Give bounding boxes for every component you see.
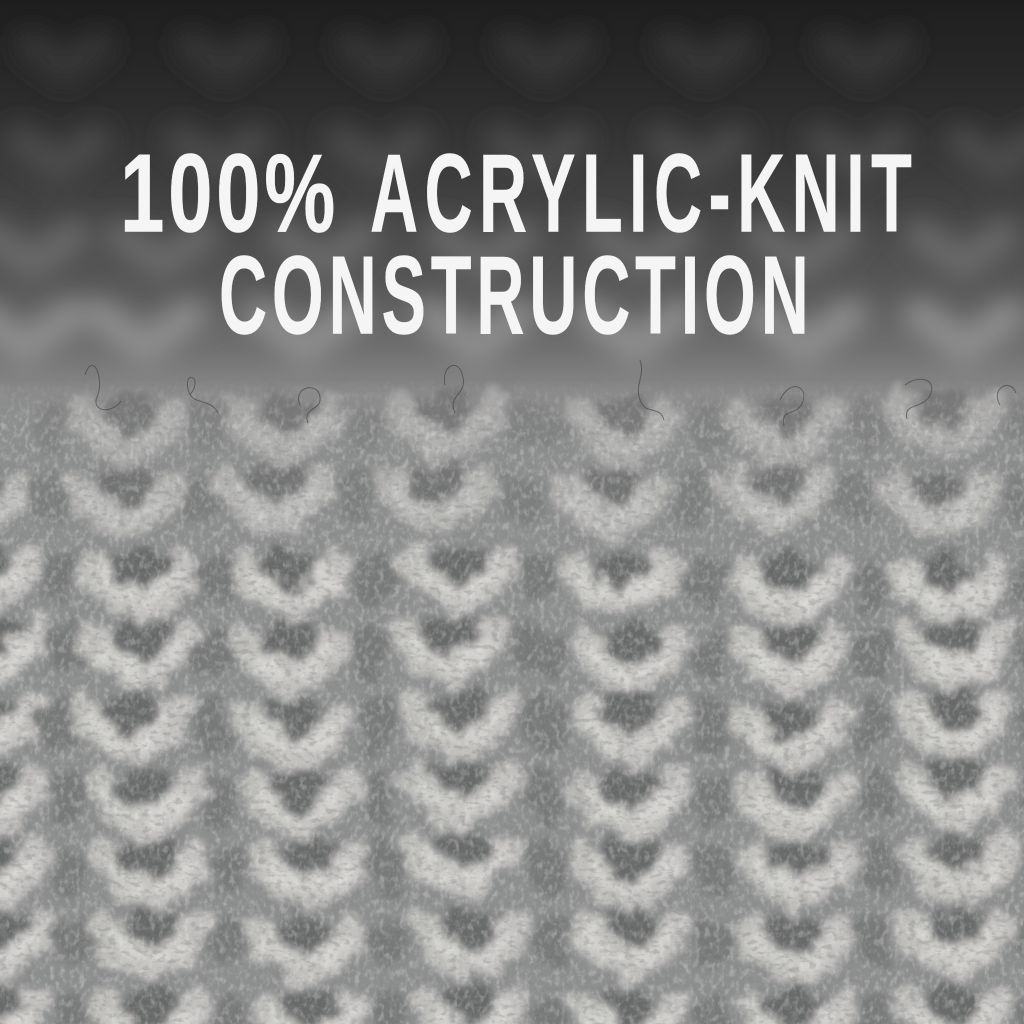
stitch row 2 [0,465,1024,525]
stitch row 9 [0,985,1024,1024]
title line 1: 100%: 100% [120,132,335,256]
stitch row 6 [0,760,1024,825]
blurred far knit rows [0,45,1024,350]
title [120,132,912,358]
stitch row 7 [0,830,1024,895]
stray fibres along fabric edge [85,360,1016,426]
stitch row 5 [0,690,1024,755]
stitch row 8 [0,910,1024,970]
stitch rows [0,390,1024,1024]
stitch row 3 [0,545,1024,610]
knit fabric close-up [0,360,1024,1024]
light fibre texture [0,378,1024,1024]
stitch row 1 [34,390,1024,452]
stitch row 4 [0,615,1024,680]
title line 1: acrylic-knit: ACRYLIC-KNIT [370,132,912,256]
title line 2: CONSTRUCTION [219,234,809,358]
fabric base [0,378,1024,1024]
dark fibre texture [0,378,1024,1024]
